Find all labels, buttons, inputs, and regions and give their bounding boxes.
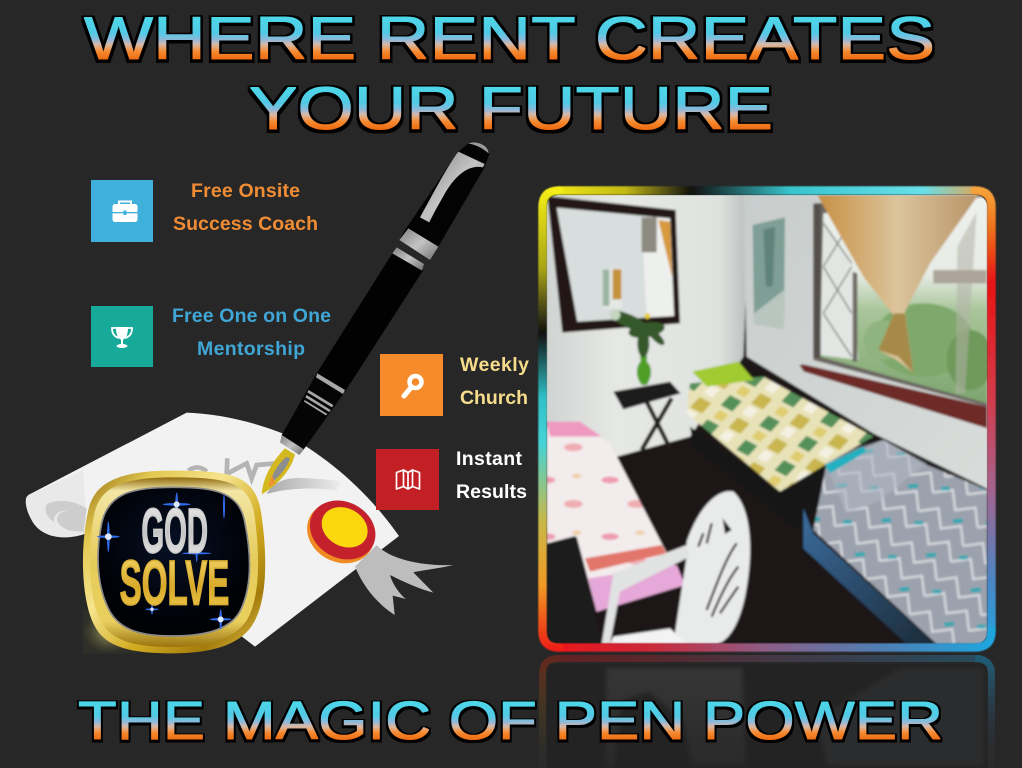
fountain pen	[262, 143, 489, 494]
scroll paper with seal	[26, 413, 453, 647]
feature: onsite success coach	[91, 180, 318, 242]
text: Free Onsite Success Coach: Success Coach	[173, 213, 318, 235]
icon: briefcase	[91, 180, 153, 242]
curl shading	[46, 501, 87, 532]
feature: weekly church	[380, 354, 529, 416]
text: Weekly Church	[460, 354, 529, 409]
pen barrel	[317, 253, 423, 392]
text: Instant Results: Instant	[456, 448, 522, 470]
cap band	[399, 228, 438, 260]
text: Free One on One Mentorship	[172, 305, 331, 360]
title	[84, 5, 935, 142]
God Solve badge	[83, 471, 265, 654]
text: Free One on One Mentorship: Mentorship	[197, 338, 305, 360]
text: Free Onsite Success Coach: Free Onsite	[191, 180, 300, 202]
lower rings	[304, 373, 345, 415]
title: YOUR FUTURE	[249, 75, 773, 142]
text: Weekly Church: Church	[460, 387, 528, 409]
pen collar	[280, 435, 304, 455]
signature scribble	[188, 458, 277, 478]
badge text	[120, 497, 229, 618]
text: Weekly Church: Weekly	[460, 354, 529, 376]
paper curl	[26, 470, 87, 537]
bedroom photo with rainbow frame	[542, 190, 993, 648]
pen grip section	[282, 373, 345, 450]
photo reflection	[542, 658, 992, 768]
ribbon	[355, 545, 453, 615]
feature: one on one mentorship	[91, 305, 331, 367]
text: Instant Results	[456, 448, 527, 503]
icon: map	[376, 449, 439, 510]
text: Free Onsite Success Coach	[173, 180, 318, 235]
black face	[98, 487, 250, 636]
icon: key	[380, 354, 443, 416]
badge text: GOD	[141, 497, 208, 567]
text: Free One on One Mentorship: Free One on One	[172, 305, 331, 327]
pen nib	[262, 448, 295, 494]
badge text: SOLVE	[120, 548, 229, 618]
cap finial	[468, 143, 489, 153]
pen clip	[420, 152, 485, 222]
text: Instant Results: Results	[456, 481, 527, 503]
icon: trophy	[91, 306, 153, 367]
ink swoosh	[267, 478, 340, 494]
gold frame	[83, 471, 265, 653]
badge glow corner	[83, 610, 136, 654]
feature: instant results	[376, 448, 527, 510]
footer heading: THE MAGIC OF PEN POWER	[78, 691, 943, 751]
paper sheet	[26, 413, 399, 647]
pen cap	[399, 143, 489, 260]
barrel ring	[392, 247, 424, 271]
sparkles	[97, 492, 231, 629]
title: WHERE RENT CREATES	[84, 5, 935, 72]
seal	[296, 489, 386, 575]
